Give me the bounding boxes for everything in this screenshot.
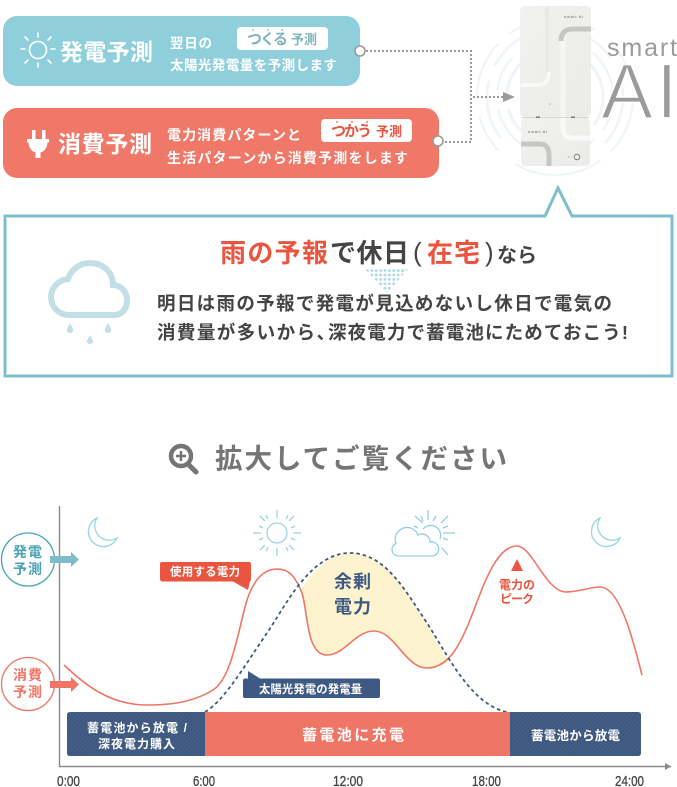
logo: smart AI: smart (607, 34, 677, 62)
line: power consumption (64, 546, 642, 705)
label: power peak (499, 559, 535, 606)
label: surplus power: 電力 (334, 597, 371, 617)
badge: 消費予測: 予測 (13, 684, 42, 700)
bar: evening discharge: 蓄電池から放電 (531, 728, 620, 743)
surplus power area (301, 553, 449, 668)
heading: rain forecast: なら (497, 244, 537, 267)
bar: night discharge: 蓄電池から放電 / (87, 720, 188, 735)
panel: speech callout (5, 188, 672, 376)
badge: 発電予測 (2, 533, 54, 586)
badge: 発電予測: 予測 (13, 561, 42, 577)
heading: 消費予測: 消費予測 (58, 131, 152, 157)
badge: 発電予測: 発電 (13, 544, 42, 560)
icon: magnifier (171, 446, 196, 472)
heading: zoom prompt: 拡大してご覧ください (215, 443, 507, 474)
icon: moon left (88, 518, 117, 547)
device: smart AI battery unit (520, 6, 591, 166)
badge: 消費予測: 消費 (13, 667, 42, 683)
text: 消費予測 description: 生活パターンから消費予測をします (167, 150, 408, 166)
tag: つくる予測: つくる (247, 31, 288, 48)
bar: night discharge (67, 712, 205, 756)
icon: moon right (591, 518, 620, 547)
decoration: dotted down arrow (364, 268, 409, 293)
heading: rain forecast: ( (413, 237, 422, 267)
callout: power used (160, 562, 251, 590)
bar: night discharge: 深夜電力購入 (98, 736, 175, 751)
device: smart AI battery unit: smart AI (528, 129, 547, 134)
tag: つかう予測: 予測 (376, 124, 402, 139)
bar: charge: 蓄電池に充電 (302, 727, 404, 744)
heading: 発電予測: 発電予測 (60, 39, 153, 65)
callout: solar generation (243, 671, 380, 698)
arrow: 発電予測 (50, 552, 79, 567)
tag: つくる予測: 予測 (291, 32, 317, 47)
panel: 発電予測 (3, 16, 360, 86)
bar: evening discharge (510, 712, 641, 756)
chart axes (60, 506, 671, 770)
text: callout body: 深夜電力で蓄電池にためておこう! (328, 322, 628, 343)
badge: 消費予測 (2, 658, 54, 710)
text: callout body (157, 293, 628, 343)
label: power peak: 電力の (499, 577, 535, 592)
axis labels (57, 773, 644, 787)
device background rings (477, 19, 633, 175)
label: power peak: ピーク (500, 592, 534, 606)
callout: solar generation: 太陽光発電の発電量 (259, 682, 362, 696)
icon: cloud and sun (392, 510, 455, 556)
text: 消費予測 description (167, 127, 408, 166)
callout: power used: 使用する電力 (170, 564, 240, 578)
text: 消費予測 description: 電力消費パターンと (167, 127, 301, 143)
heading: rain forecast: で休日 (330, 238, 409, 268)
heading: rain forecast: 在宅 (427, 238, 480, 268)
chart: power forecast over 24 hours (2, 506, 671, 787)
tag: つかう予測 (321, 119, 412, 142)
text: callout body: 明日は雨の予報で発電が見込めないし休日で電気の (157, 293, 612, 314)
bar: charge (205, 712, 510, 756)
line: solar generation (205, 553, 507, 712)
panel: 消費予測 (3, 108, 439, 178)
icon: sun (21, 33, 55, 67)
text: callout body: 消費量が多いから、 (157, 322, 335, 343)
connector node: 発電予測 (355, 46, 365, 56)
connector node: 消費予測 (433, 136, 443, 146)
tag: つかう予測: つかう (331, 123, 372, 140)
heading: rain forecast: 雨の予報 (220, 238, 328, 268)
text: 発電予測 description: 翌日の (170, 36, 212, 51)
label: surplus power (334, 572, 371, 617)
arrow into device (503, 92, 515, 102)
icon: rain cloud (51, 263, 127, 344)
text: 発電予測 description (170, 36, 337, 73)
tag: つくる予測 (237, 27, 328, 50)
device: smart AI battery unit: smart AI (564, 14, 583, 19)
heading: rain forecast (220, 237, 537, 268)
icon: sun (253, 510, 301, 556)
text: 発電予測 description: 太陽光発電量を予測します (170, 57, 337, 73)
heading: rain forecast: ) (485, 237, 494, 267)
icon: plug (27, 130, 49, 158)
arrow: 消費予測 (50, 677, 79, 692)
label: surplus power: 余剰 (334, 572, 371, 592)
connector: dotted lines to device (366, 51, 504, 142)
